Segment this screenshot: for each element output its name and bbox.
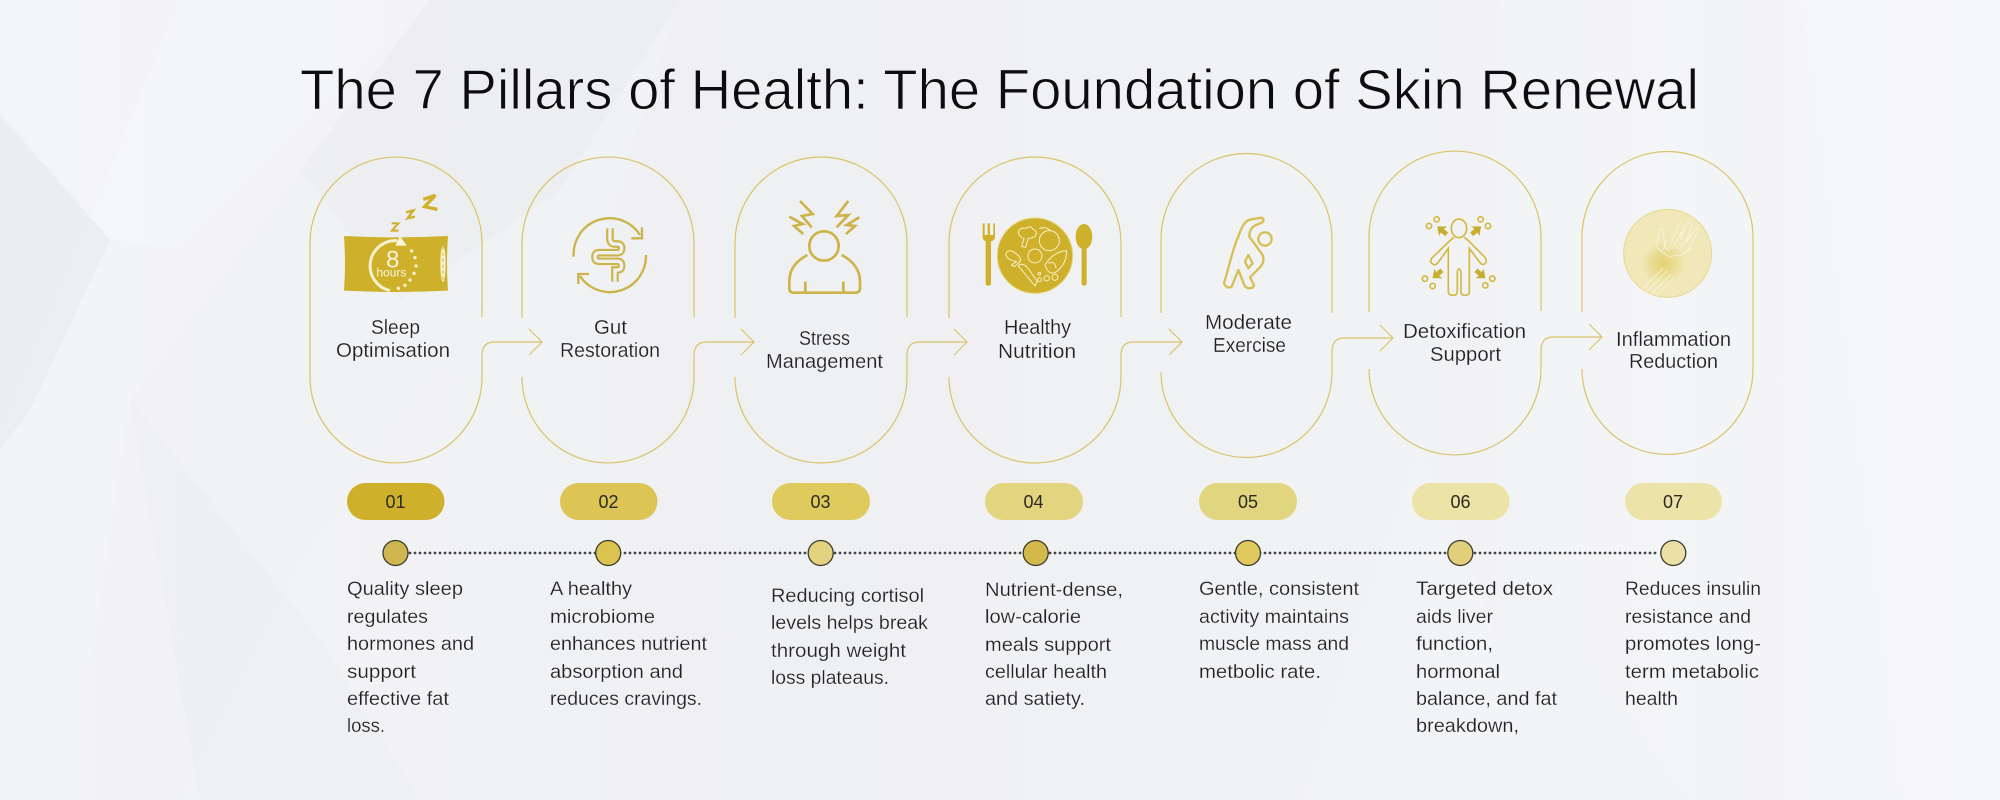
text: description 7 [1625, 578, 1761, 710]
text: description 4: and satiety. [985, 688, 1085, 710]
text: description 6: balance, and fat [1416, 688, 1558, 710]
badge 05: 05 [1238, 492, 1258, 512]
text: description 6: hormonal [1416, 661, 1500, 683]
text: description 2: reduces cravings. [550, 688, 702, 710]
panel: Moderate Exercise [1161, 154, 1393, 458]
text: description 4: Nutrient-dense, [985, 579, 1123, 601]
label: Gut [594, 317, 627, 339]
label: Stress [799, 328, 850, 350]
icon: detox body [1422, 217, 1495, 295]
icon: stretching figure [1224, 218, 1272, 288]
text: description 5: Gentle, consistent [1199, 578, 1360, 600]
text: description 1: loss. [347, 715, 385, 737]
text: description 2 [550, 578, 708, 710]
badge 07: 07 [1663, 492, 1683, 512]
text: description 7: promotes long- [1625, 633, 1761, 655]
badge 04: 04 [1023, 492, 1044, 512]
text: description 5: activity maintains [1199, 606, 1349, 628]
number badges [347, 483, 1722, 520]
text: description 6 [1416, 578, 1558, 737]
label: Reduction [1629, 351, 1718, 373]
badge 02: 02 [598, 492, 619, 512]
label [1205, 312, 1292, 357]
text: description 4: meals support [985, 634, 1112, 656]
label: Healthy [1004, 317, 1071, 339]
label: Exercise [1213, 335, 1286, 357]
text: description 1: regulates [347, 606, 428, 628]
icon: pillow with 8 hours clock: hours [376, 266, 406, 280]
label: Management [766, 351, 883, 373]
text: description 3: Reducing cortisol [771, 585, 924, 607]
text: description 2: microbiome [550, 606, 655, 628]
label: Moderate [1205, 312, 1292, 334]
text: description 7: Reduces insulin [1625, 578, 1761, 600]
icon: inflamed hand [1624, 209, 1712, 297]
label [1616, 329, 1731, 373]
text: description 2: absorption and [550, 661, 683, 683]
text: description 4: cellular health [985, 661, 1107, 683]
panel: Healthy Nutrition [949, 157, 1182, 463]
text: description 1: support [347, 661, 417, 683]
text: description 1: Quality sleep [347, 578, 463, 600]
text: description 7: health [1625, 688, 1678, 710]
text: description 6: function, [1416, 633, 1493, 655]
text: description 2: A healthy [550, 578, 632, 600]
label [998, 317, 1076, 363]
badge 01: 01 [385, 492, 406, 512]
pill outline and arrow 6 [1369, 151, 1602, 455]
label [560, 317, 660, 362]
text: description 3 [771, 585, 928, 689]
pill outline [1582, 152, 1753, 455]
icon: stressed person [789, 201, 860, 293]
badge 02 [560, 483, 658, 520]
panel: Stress Management [735, 157, 967, 463]
pill outline and arrow 1 [310, 157, 542, 463]
label [1403, 321, 1526, 366]
badge 03 [772, 483, 870, 520]
label: Inflammation [1616, 329, 1731, 351]
label: Detoxification [1403, 321, 1526, 343]
text: description 4 [985, 579, 1123, 710]
text: description 1 [347, 578, 474, 737]
badge 01 [347, 483, 444, 520]
badge 06 [1412, 483, 1510, 520]
text: description 5: muscle mass and [1199, 633, 1349, 655]
pill outline and arrow 3 [735, 157, 967, 463]
pill outline and arrow 2 [522, 157, 754, 463]
text: description 7: resistance and [1625, 606, 1751, 628]
text: description 6: aids liver [1416, 606, 1493, 628]
panel: Sleep Optimisation [310, 157, 542, 463]
text: description 1: effective fat [347, 688, 450, 710]
icon: pillow with 8 hours clock [344, 195, 448, 292]
icon: gut [574, 218, 646, 292]
text: description 5 [1199, 578, 1360, 683]
pill outline and arrow 5 [1161, 154, 1393, 458]
panel: Detoxification Support [1369, 151, 1602, 455]
badge 05 [1199, 483, 1297, 520]
timeline [383, 540, 1686, 566]
label [336, 317, 450, 362]
text: description 3: through weight [771, 640, 907, 662]
badge 04 [985, 483, 1083, 520]
text: description 6: Targeted detox [1416, 578, 1553, 600]
icon: pillow with 8 hours clock: 8 [386, 246, 399, 273]
pill outline and arrow 4 [949, 157, 1182, 463]
badge 03: 03 [810, 492, 831, 512]
icon: plate with fork and spoon [983, 218, 1092, 293]
label: Nutrition [998, 341, 1076, 363]
panel: Gut Restoration [522, 157, 754, 463]
label: Restoration [560, 340, 660, 362]
text: description 3: levels helps break [771, 612, 928, 634]
text: description 4: low-calorie [985, 606, 1081, 628]
label: Sleep [371, 317, 420, 339]
text: description 2: enhances nutrient [550, 633, 708, 655]
badge 07 [1625, 483, 1722, 520]
text: description 5: metbolic rate. [1199, 661, 1321, 683]
panel: Inflammation Reduction [1582, 152, 1753, 455]
label: Support [1430, 344, 1501, 366]
badge 06: 06 [1450, 492, 1471, 512]
text: description 1: hormones and [347, 633, 474, 655]
label: Optimisation [336, 340, 450, 362]
text: description 3: loss plateaus. [771, 667, 889, 689]
label [766, 328, 883, 373]
text: description 6: breakdown, [1416, 715, 1519, 737]
title: The 7 Pillars of Health: The Foundation of Skin Renewal [300, 58, 1699, 122]
text: description 7: term metabolic [1625, 661, 1759, 683]
